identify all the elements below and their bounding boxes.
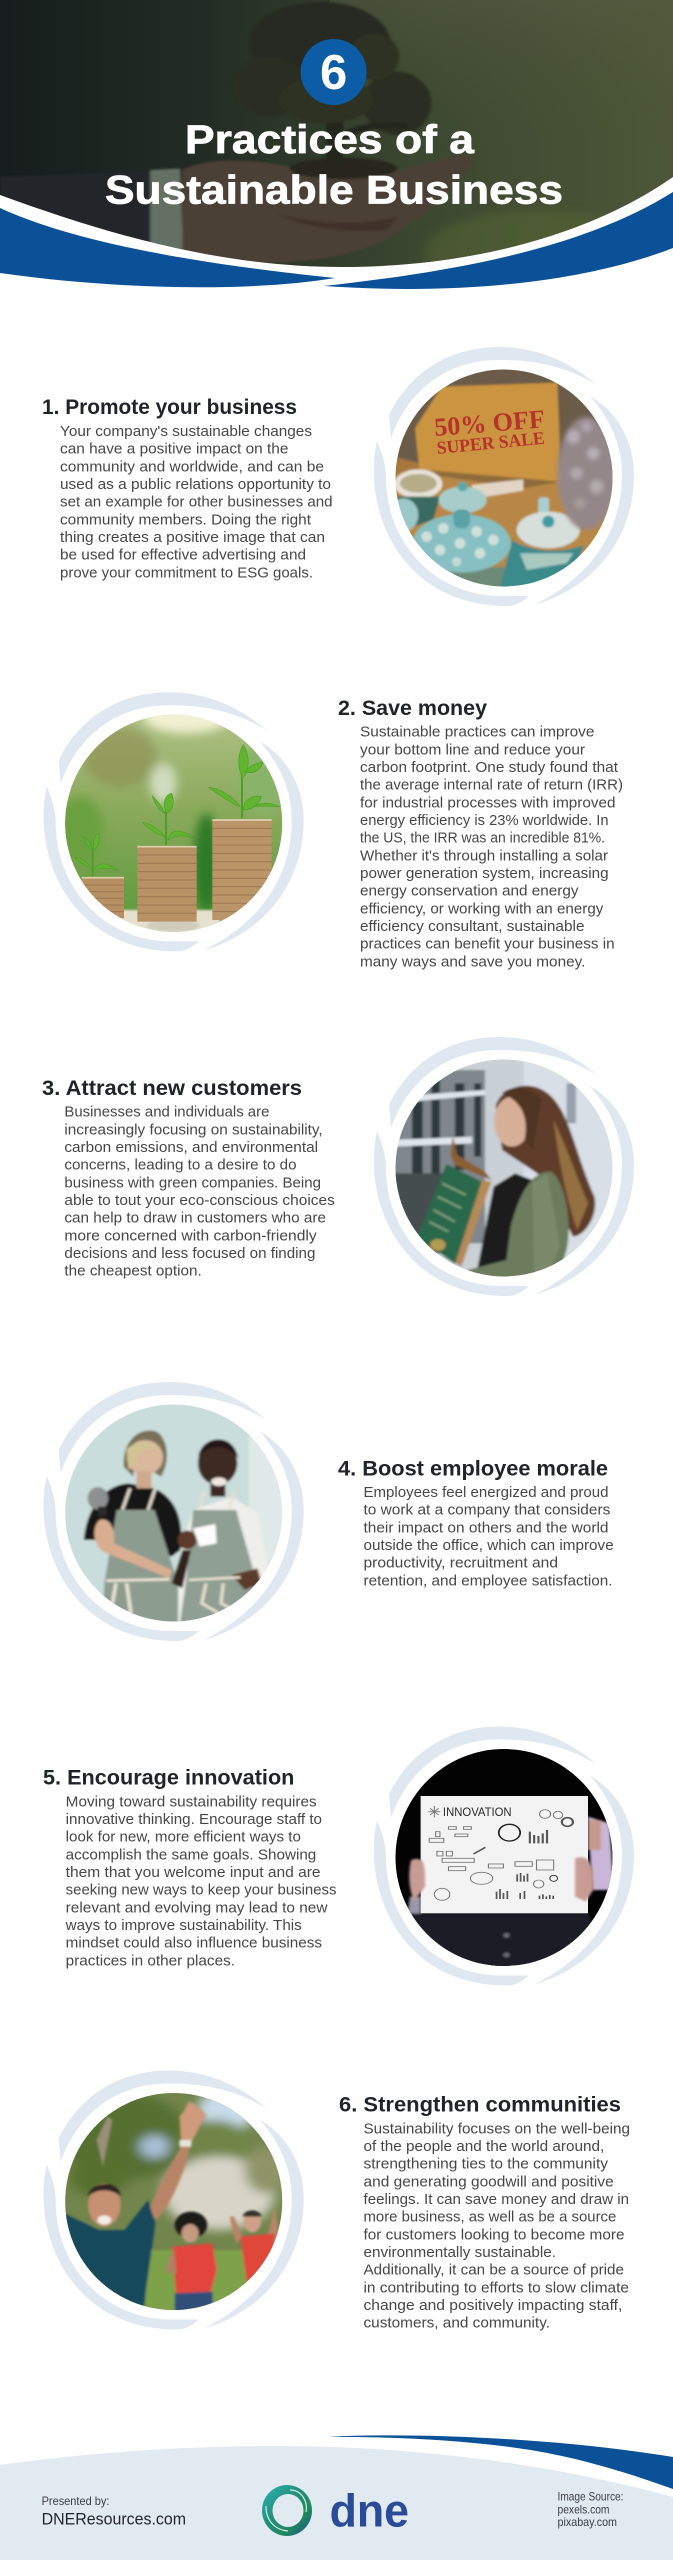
body text 6: and generating goodwill and positive <box>364 2174 614 2190</box>
number badge: 6 <box>320 46 347 100</box>
body text 2: efficiency, or working with an energy <box>360 901 604 917</box>
body text 5: practices in other places. <box>66 1953 235 1969</box>
body text 6: feelings. It can save money and draw in <box>364 2192 629 2208</box>
body text 1: Your company's sustainable changes <box>60 424 312 440</box>
body text 6 <box>364 2121 630 2332</box>
presented by <box>42 2494 186 2528</box>
body text 6: Sustainability focuses on the well-being <box>364 2121 630 2137</box>
footer blue swoosh <box>328 2435 673 2489</box>
sign text: SUPER SALE <box>436 428 546 458</box>
body text 5: look for new, more efficient ways to <box>66 1830 301 1846</box>
body text 1: community and worldwide, and can be <box>60 459 324 475</box>
body text 5: accomplish the same goals. Showing <box>66 1847 316 1863</box>
body text 5: ways to improve sustainability. This <box>65 1918 302 1934</box>
body text 2: Whether it's through installing a solar <box>360 848 608 864</box>
body text 4: retention, and employee satisfaction. <box>364 1573 612 1589</box>
body text 2 <box>360 725 623 970</box>
photo 1: sale sign and teapots <box>396 370 612 586</box>
body text 1: prove your commitment to ESG goals. <box>60 565 313 581</box>
body text 1: be used for effective advertising and <box>60 548 306 564</box>
body text 3 <box>64 1105 335 1280</box>
body text 1: thing creates a positive image that can <box>60 530 325 546</box>
body text 4: their impact on others and the world <box>364 1520 608 1536</box>
heading 5: 5. Encourage innovation <box>43 1767 294 1790</box>
body text 2: your bottom line and reduce your <box>360 742 585 758</box>
image source: pixabay.com <box>558 2515 617 2529</box>
body text 5: them that you welcome input and are <box>66 1865 321 1881</box>
panel: 5 encourage innovation <box>43 1726 634 1986</box>
blurred vase <box>557 417 616 530</box>
body text 5: Moving toward sustainability requires <box>66 1794 317 1810</box>
body text 6: for customers looking to become more <box>364 2227 624 2243</box>
title <box>105 118 563 212</box>
title: Practices of a <box>185 118 475 162</box>
big teapot <box>412 510 511 573</box>
title: Sustainable Business <box>105 168 563 212</box>
body text 5: mindset could also influence business <box>66 1936 322 1952</box>
body text 6: strengthening ties to the community <box>364 2157 609 2173</box>
body text 2: energy efficiency is 23% worldwide. In <box>360 813 609 829</box>
body text 1: used as a public relations opportunity to <box>60 477 331 493</box>
body text 4: to work at a company that considers <box>364 1503 610 1519</box>
image source: Image Source: <box>558 2490 624 2504</box>
image source <box>558 2490 624 2529</box>
number badge <box>301 39 367 105</box>
body text 1: community members. Doing the right <box>60 512 311 528</box>
body text 2: efficiency consultant, sustainable <box>360 919 584 935</box>
body text 3: more concerned with carbon-friendly <box>64 1228 317 1244</box>
header banner <box>0 0 673 310</box>
body text 4: productivity, recruitment and <box>364 1556 558 1572</box>
white swoosh <box>0 177 673 310</box>
body text 3: carbon emissions, and environmental <box>64 1140 318 1156</box>
body text 3: increasingly focusing on sustainability, <box>64 1122 323 1138</box>
ring 1 <box>374 347 634 606</box>
heading 4: 4. Boost employee morale <box>338 1458 608 1481</box>
body text 6: of the people and the world around, <box>364 2139 604 2155</box>
photo 3: woman with green shopping bag <box>396 1060 612 1276</box>
blue swoosh right <box>324 192 673 289</box>
photo 4: two baristas in aprons <box>65 1404 282 1622</box>
photo 2: coin stacks with seedlings <box>65 714 282 932</box>
heading 2: 2. Save money <box>338 697 487 720</box>
blue swoosh left <box>0 208 335 287</box>
board sketches <box>428 1806 573 1900</box>
board title: INNOVATION <box>443 1805 512 1819</box>
presented by: Presented by: <box>42 2494 109 2508</box>
ring 2 <box>44 692 304 951</box>
body text 5: seeking new ways to keep your business <box>66 1883 336 1899</box>
body text 2: many ways and save you money. <box>360 954 585 970</box>
body text 1: can have a positive impact on the <box>60 442 288 458</box>
body text 3: able to tout your eco-conscious choices <box>64 1193 335 1209</box>
photo 6: people cheering in a park <box>65 2093 282 2310</box>
photo 5: person holding innovation sketch board <box>396 1749 612 1966</box>
body text 6: environmentally sustainable. <box>364 2245 556 2261</box>
heading 1: 1. Promote your business <box>42 396 297 419</box>
body text 2: energy conservation and energy <box>360 884 579 900</box>
body text 5: relevant and evolving may lead to new <box>66 1900 328 1916</box>
panel: 4 boost employee morale <box>44 1382 614 1641</box>
panel: 1 promote your business <box>42 347 634 606</box>
panel: 2 save money <box>44 692 623 970</box>
panel: 3 attract new customers <box>42 1037 635 1296</box>
body text 1: set an example for other businesses and <box>60 495 333 511</box>
heading 3: 3. Attract new customers <box>42 1077 302 1100</box>
panel: 6 strengthen communities <box>44 2070 630 2332</box>
body text 3: Businesses and individuals are <box>64 1105 269 1121</box>
body text 6: more business, as well as be a source <box>364 2210 616 2226</box>
body text 3: the cheapest option. <box>64 1264 202 1280</box>
body text 3: business with green companies. Being <box>64 1175 321 1191</box>
body text 1 <box>60 424 333 581</box>
ring 5 <box>374 1726 634 1986</box>
image source: pexels.com <box>558 2502 610 2516</box>
presented by: DNEResources.com <box>42 2509 186 2528</box>
icon: dne logo ring <box>262 2485 312 2536</box>
body text 6: Additionally, it can be a source of pride <box>364 2263 624 2279</box>
coin stacks <box>82 820 272 922</box>
heading 6: 6. Strengthen communities <box>339 2094 621 2117</box>
sign text <box>436 410 544 454</box>
header photo: hand holding tree <box>0 0 673 297</box>
body text 4: outside the office, which can improve <box>364 1538 614 1554</box>
footer background <box>0 2446 673 2560</box>
seedlings <box>75 745 280 877</box>
sign text: 50% OFF <box>433 404 546 442</box>
body text 2: the average internal rate of return (IRR) <box>360 778 623 794</box>
body text 5 <box>65 1794 337 1969</box>
body text 4: Employees feel energized and proud <box>364 1485 608 1501</box>
body text 3: concerns, leading to a desire to do <box>64 1158 297 1174</box>
ring 4 <box>44 1382 304 1641</box>
body text 4 <box>364 1485 614 1589</box>
footer <box>0 2435 673 2560</box>
body text 2: for industrial processes with improved <box>360 795 616 811</box>
ring 3 <box>374 1037 634 1296</box>
hands holding the board <box>409 1857 593 1902</box>
body text 3: decisions and less focused on finding <box>64 1246 315 1262</box>
body text 2: power generation system, increasing <box>360 866 609 882</box>
body text 6: customers, and community. <box>364 2316 550 2332</box>
body text 6: change and positively impacting staff, <box>364 2298 622 2314</box>
logo wordmark: dne <box>330 2485 409 2537</box>
body text 2: the US, the IRR was an incredible 81%. <box>360 831 605 847</box>
body text 3: can help to draw in customers who are <box>64 1211 326 1227</box>
body text 2: Sustainable practices can improve <box>360 725 594 741</box>
body text 6: in contributing to efforts to slow climate <box>364 2280 629 2296</box>
body text 2: carbon footprint. One study found that <box>360 760 618 776</box>
ring 6 <box>44 2070 304 2330</box>
body text 2: practices can benefit your business in <box>360 937 615 953</box>
body text 5: innovative thinking. Encourage staff to <box>66 1812 322 1828</box>
